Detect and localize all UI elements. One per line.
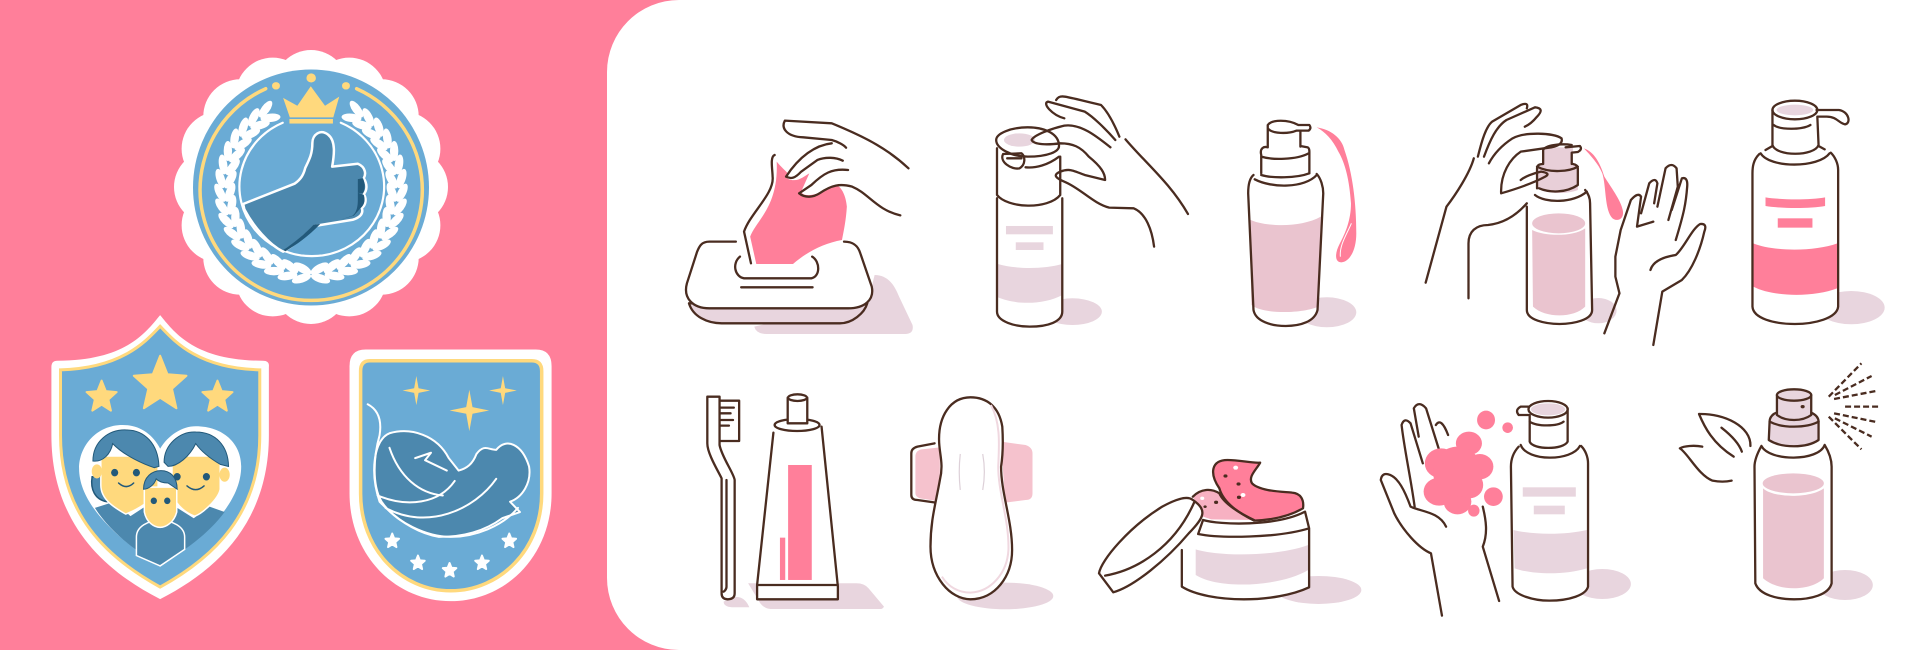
toothbrush [707,397,739,599]
badge: thumbs up quality seal [170,46,452,328]
shield blue [60,326,260,587]
shadow [1574,569,1631,599]
band and labels [1753,197,1837,295]
cap highlight [1777,105,1813,115]
sparkles [403,376,517,431]
shadow [957,583,1053,609]
pad [930,397,1012,599]
drip [1317,127,1356,262]
shield blue [361,361,542,591]
liquid [1532,213,1585,315]
shadow [1817,570,1873,600]
shirts [95,502,225,565]
body [1755,445,1832,599]
wipe [750,162,847,264]
body, collar and pump outline [1248,121,1323,326]
box base [689,303,867,323]
scalloped white seal [170,46,452,328]
body [1752,153,1838,324]
shadow [1580,298,1617,323]
bottle body [997,198,1062,327]
shadow [754,275,913,334]
body fill [1248,174,1323,326]
hand [1032,96,1188,247]
leaves [1680,414,1750,482]
wings [915,442,1032,503]
badge: family shield [51,315,269,599]
shield outer white [350,350,552,601]
icon: pump bottle with drip [1248,121,1356,327]
icon: open cream jar [1099,460,1361,604]
shadow [1043,298,1102,325]
liquid [1763,473,1824,588]
liquid [1249,217,1321,312]
eyes and smiles [111,469,210,481]
body [1527,190,1592,324]
box lid [686,242,872,308]
woman behind hair [92,477,113,502]
cream dots [1203,474,1241,508]
cap [996,127,1059,157]
cap [1777,395,1811,420]
lid [1099,498,1202,592]
stars [87,356,233,411]
label and band [998,226,1062,303]
jar outline [1182,512,1309,599]
icon: wet wipes box with hand [686,121,913,334]
right hand [1604,165,1705,345]
collar [1769,413,1819,446]
laurel wreath [212,97,410,287]
icon: hand with foam and bottle [1381,401,1631,616]
shadows [724,583,884,609]
bottle outline [997,148,1062,327]
spray [1829,363,1880,449]
white panel [607,0,1920,650]
tube [757,425,838,599]
yellow ring and dots [200,73,422,300]
white stars [385,534,516,577]
icon: hands pumping bottle [1426,104,1705,345]
family [92,430,230,566]
drip [1584,148,1623,220]
band, labels and cap [1513,403,1587,573]
faces [101,456,158,514]
icon: lotion bottle with pink band [1752,101,1885,324]
icon: spray bottle with leaves [1680,363,1880,600]
pump fill [1537,147,1578,193]
wipe outline and hand [744,121,908,263]
heart [79,425,241,567]
hand [1381,404,1499,616]
tube cap [775,419,820,431]
jar body [1182,527,1309,599]
thumb up hand [243,132,366,252]
icon: tall bottle with hand [996,96,1188,327]
blue disc [193,70,429,306]
shadow [1298,297,1356,327]
inner ring [239,123,384,256]
icon: toothbrush and toothpaste [707,394,884,609]
outline [1511,407,1588,601]
icon: sanitary pad [911,397,1053,609]
shield outer white [51,315,269,599]
cream [1193,490,1254,520]
outline [1752,110,1849,324]
crown [283,86,339,124]
badge: feather shield [350,350,552,601]
left hand [1426,104,1562,298]
bottle outline [1527,144,1592,324]
feather [368,404,530,537]
shadow [1818,291,1885,324]
body [1511,446,1588,601]
child [136,520,185,566]
jar label [1196,545,1308,585]
shadow [1276,576,1361,604]
foam [1424,411,1513,517]
bottle outline [1755,445,1832,599]
hair [93,430,159,468]
